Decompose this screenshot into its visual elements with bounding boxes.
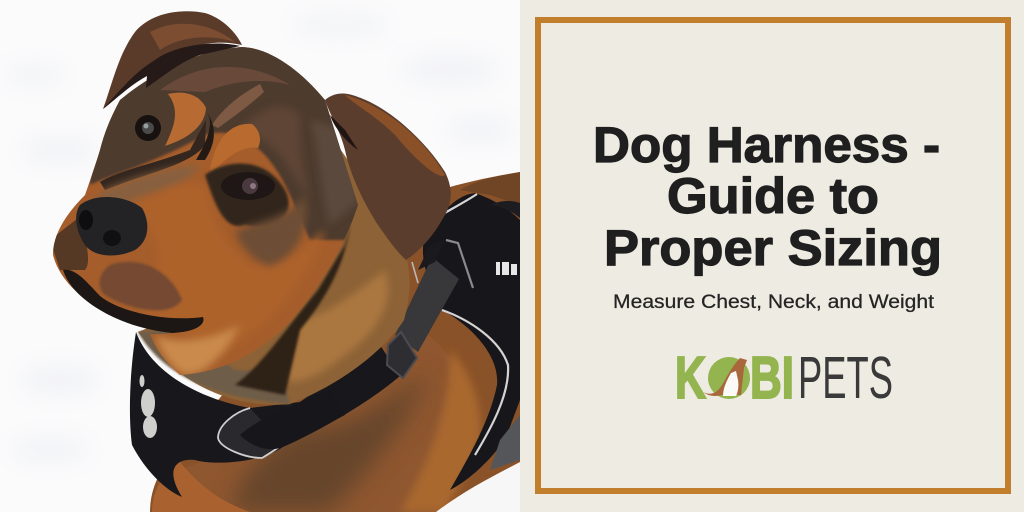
ear: right bbox=[325, 94, 451, 260]
brow: right bbox=[210, 124, 260, 172]
logo: Kobi Pets: BI bbox=[750, 345, 794, 411]
snow patch bbox=[436, 462, 520, 512]
title: Proper Sizing bbox=[604, 220, 942, 276]
panel border bbox=[538, 20, 1008, 491]
nose bbox=[76, 197, 147, 255]
reflective panel bbox=[218, 408, 283, 458]
panel: title card background bbox=[520, 0, 1024, 512]
subtitle: Measure Chest, Neck, and Weight bbox=[613, 292, 935, 313]
forehead bbox=[90, 40, 370, 240]
mouth bbox=[63, 270, 203, 333]
eye: left bbox=[135, 115, 161, 141]
dog neck fur bbox=[138, 120, 410, 405]
ear: folded left bbox=[103, 11, 242, 109]
paw marks bbox=[140, 375, 157, 438]
strap bbox=[395, 257, 459, 352]
cheek bbox=[138, 186, 327, 333]
title: Guide to bbox=[667, 168, 879, 224]
harness logo bbox=[496, 262, 517, 275]
logo: Kobi Pets bbox=[675, 345, 893, 411]
title bbox=[593, 117, 942, 276]
eye: right bbox=[221, 172, 275, 200]
logo: Kobi Pets: PETS bbox=[798, 345, 893, 411]
dog head bbox=[53, 47, 358, 375]
harness bbox=[130, 193, 520, 497]
brow: left bbox=[165, 93, 206, 146]
dog body bbox=[150, 172, 520, 512]
title: Dog Harness - bbox=[593, 117, 940, 173]
logo: Kobi Pets: K bbox=[675, 345, 706, 411]
panel: dog photo bbox=[0, 0, 520, 512]
icon: dog and cat bbox=[703, 358, 747, 396]
